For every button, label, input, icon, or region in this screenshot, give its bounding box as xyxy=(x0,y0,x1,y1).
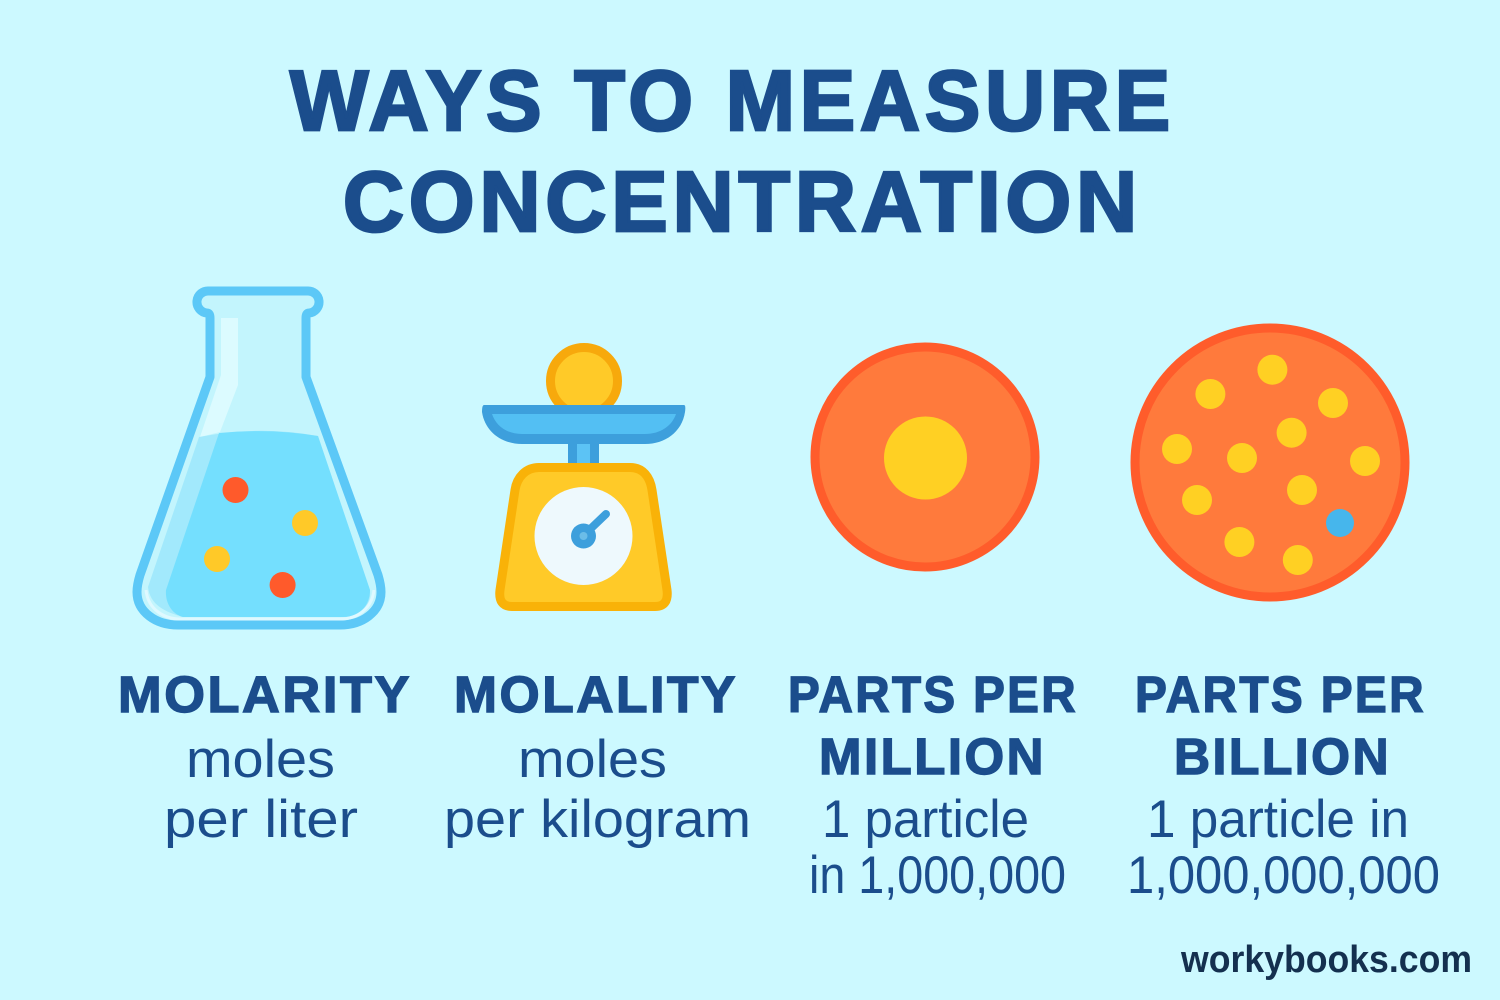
text block: molarity: per liter xyxy=(164,790,358,849)
text block: molality: MOLALITY xyxy=(454,666,738,723)
text block: molality xyxy=(444,666,751,849)
text block: parts per billion: BILLION xyxy=(1174,728,1391,785)
icon: weighing scale xyxy=(482,348,685,606)
text block: molality: per kilogram xyxy=(444,790,751,849)
text block: parts per billion: 1,000,000,000 xyxy=(1127,846,1440,905)
text block: parts per billion: 1 particle in xyxy=(1147,790,1409,849)
icon: ppm circle with one particle xyxy=(815,347,1035,567)
text block: parts per million: 1 particle xyxy=(822,790,1029,849)
text block: parts per million: MILLION xyxy=(819,728,1046,785)
text block: molarity: MOLARITY xyxy=(118,666,412,723)
text block: parts per million: in 1,000,000 xyxy=(809,846,1066,905)
text block: parts per million: PARTS PER xyxy=(788,666,1078,723)
title xyxy=(290,54,1175,250)
text block: molality: moles xyxy=(518,730,667,789)
text block: parts per billion xyxy=(1127,666,1440,905)
icon: ppb circle with many particles xyxy=(1135,328,1405,597)
watermark: workybooks.com xyxy=(1180,939,1472,981)
icon: flask with liquid and particles xyxy=(137,291,381,625)
text block: parts per billion: PARTS PER xyxy=(1135,666,1426,723)
title: CONCENTRATION xyxy=(343,155,1142,250)
text block: molarity: moles xyxy=(186,730,335,789)
text block: parts per million xyxy=(788,666,1078,905)
text block: molarity xyxy=(118,666,412,849)
title: WAYS TO MEASURE xyxy=(290,54,1175,149)
